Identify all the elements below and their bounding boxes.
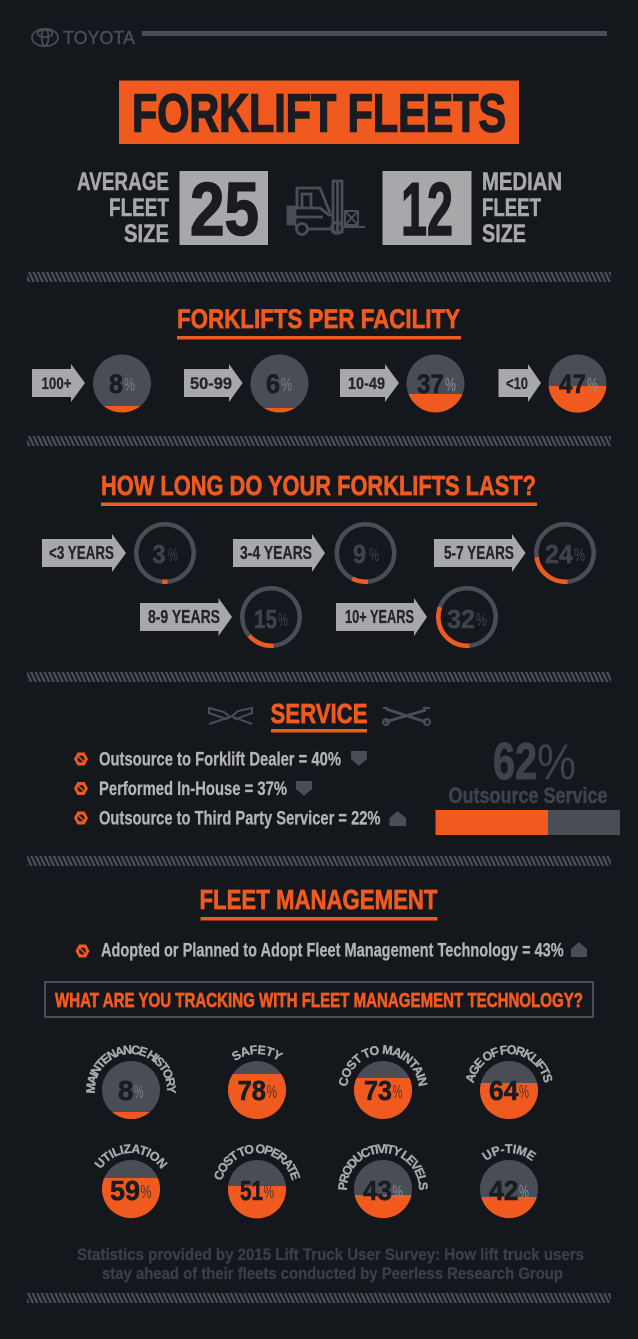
chart: safety 78%: SAFETY [232, 1045, 284, 1060]
heading: forklifts per facility: FORKLIFTS PER FACILITY [177, 304, 460, 334]
list item: in-house: Performed In-House = 37% [99, 779, 287, 800]
stat: under 10 47% [498, 354, 606, 413]
icon: bolt bullet [74, 752, 88, 766]
stat: under 3 years 3%: % [168, 545, 178, 565]
chart: cost to maintain 73% [339, 1045, 428, 1119]
stat: 100+ 8%: 100+ [42, 374, 72, 393]
stat: 62% outsource service: Outsource Service [448, 783, 608, 808]
title: FORKLIFT FLEETS [132, 84, 506, 144]
chart: up-time 42%: UP-TIME [482, 1144, 536, 1162]
stat: 25: 25 [190, 167, 259, 251]
stat: under 3 years 3%: <3 YEARS [49, 542, 114, 563]
icon: bolt bullet [74, 812, 88, 824]
header rule [142, 31, 607, 36]
chart: maintenance history 8%: MAINTENANCE HISTORY [86, 1045, 176, 1094]
stat: 5-7 years 24%: 24 [545, 539, 574, 569]
icon: down arrow [351, 751, 367, 766]
chart: cost to maintain 73%: COST TO MAINTAIN [339, 1045, 428, 1086]
chart: productivity levels 43%: 43 [363, 1175, 392, 1206]
chart: safety 78% [228, 1045, 286, 1119]
list item: third party: Outsource to Third Party Servicer = 22% [99, 808, 381, 830]
stat: 5-7 years 24%: 5-7 YEARS [444, 542, 514, 563]
icon: crossed screwdrivers [209, 708, 252, 724]
stat: 100+ 8%: % [124, 375, 135, 395]
chart: up-time 42%: % [519, 1182, 529, 1202]
stat: 62% outsource service: 62 [493, 733, 537, 791]
stat: under 3 years 3% [42, 522, 196, 584]
chart: cost to maintain 73%: % [392, 1082, 402, 1102]
panel: average fleet size [77, 167, 268, 251]
stat: 10+ years 32%: 32 [447, 604, 475, 634]
icon: bolt bullet [74, 782, 88, 795]
icon: up arrow [390, 811, 406, 826]
icon: up arrow [571, 942, 587, 957]
stat: 3-4 years 9% [233, 522, 397, 584]
chart: safety 78%: % [266, 1082, 277, 1102]
stat: 3-4 years 9%: % [369, 545, 379, 565]
panel: fleet management [44, 884, 594, 1218]
bar: 62% [436, 810, 620, 835]
chart: cost to maintain 73%: 73 [364, 1075, 392, 1106]
icon: bolt bullet [76, 944, 90, 958]
stat: under 10 47%: % [587, 375, 598, 395]
panel: how long do your forklifts last [42, 470, 596, 648]
callout: what are you tracking [45, 982, 593, 1017]
stat: 10-49 37%: % [445, 375, 456, 395]
stat: 8-9 years 15% [140, 586, 302, 648]
chart: utilization 59%: UTILIZATION [94, 1144, 168, 1169]
chart: up-time 42%: 42 [489, 1175, 518, 1206]
stat: 62% outsource service: % [537, 734, 576, 790]
chart: safety 78%: 78 [238, 1075, 266, 1106]
chart: maintenance history 8% [86, 1045, 176, 1119]
chart: age of forklifts 64%: 64 [489, 1075, 519, 1106]
panel: service [74, 698, 620, 835]
icon: down arrow [296, 781, 312, 796]
stat: under 10 47%: <10 [506, 374, 528, 393]
chart: cost to operate 51%: COST TO OPERATE [214, 1144, 300, 1181]
chart: age of forklifts 64% [466, 1045, 552, 1120]
chart: age of forklifts 64%: AGE OF FORKLIFTS [466, 1045, 552, 1084]
chart: utilization 59%: 59 [110, 1175, 140, 1206]
stat: 10-49 37% [340, 354, 464, 412]
footer: source note: stay ahead of their fleets conducted by Peerless Research Group [102, 1264, 563, 1283]
chart: productivity levels 43%: PRODUCTIVITY LEVELS [338, 1144, 428, 1190]
chart: productivity levels 43%: % [392, 1182, 403, 1202]
stat: under 3 years 3%: 3 [152, 539, 166, 569]
chart: maintenance history 8%: 8 [118, 1075, 134, 1106]
stat: 10-49 37%: 10-49 [348, 374, 385, 393]
label: median fleet size [482, 168, 562, 248]
stat: 3-4 years 9%: 9 [353, 539, 366, 569]
stat: 5-7 years 24% [434, 522, 596, 584]
stat: 8-9 years 15%: 8-9 YEARS [148, 606, 220, 627]
stat: 100+ 8%: 8 [109, 369, 123, 399]
icon: forklift [288, 181, 365, 234]
heading: fleet management: FLEET MANAGEMENT [200, 884, 438, 915]
footer: source note: Statistics provided by 2015 Lift Truck User Survey: How lift truck users [77, 1245, 584, 1264]
chart: cost to operate 51%: 51 [240, 1175, 263, 1206]
stat: under 10 47%: 47 [559, 369, 586, 399]
stat: 100+ 8% [32, 354, 151, 413]
list item: forklift dealer: Outsource to Forklift Dealer = 40% [99, 750, 341, 770]
label: average fleet size [77, 168, 169, 248]
chart: utilization 59%: % [140, 1182, 152, 1202]
icon: crossed wrenches [383, 708, 430, 725]
icon: Toyota emblem [32, 29, 58, 46]
label: average fleet size: AVERAGE [77, 168, 169, 196]
header: Toyota logo and rule [32, 28, 607, 48]
stat: 50-99 6% [184, 354, 308, 412]
chart: up-time 42% [480, 1144, 538, 1218]
stat: 5-7 years 24%: % [574, 545, 585, 565]
stat: 10+ years 32%: % [476, 610, 487, 630]
label: average fleet size: SIZE [124, 220, 169, 248]
stat: 3-4 years 9%: 3-4 YEARS [240, 542, 312, 563]
panel: median fleet size [382, 167, 562, 251]
stat: 10-49 37%: 37 [417, 369, 444, 399]
chart: utilization 59% [94, 1144, 168, 1218]
heading: service: SERVICE [270, 698, 368, 729]
chart: age of forklifts 64%: % [519, 1082, 529, 1102]
stat: 10+ years 32% [336, 586, 498, 648]
stat: 50-99 6%: 50-99 [190, 374, 232, 393]
stat: 50-99 6%: 6 [266, 369, 280, 399]
heading: fleet management [200, 884, 438, 920]
stat: 12 [382, 167, 472, 251]
label: median fleet size: FLEET [482, 194, 541, 222]
chart: cost to operate 51%: % [264, 1182, 274, 1202]
chart: cost to operate 51% [214, 1144, 300, 1218]
stat: 8-9 years 15%: % [278, 610, 288, 630]
Toyota wordmark: TOYOTA [63, 28, 135, 48]
label: median fleet size: SIZE [482, 220, 526, 248]
chart: productivity levels 43% [338, 1144, 428, 1218]
panel: forklifts per facility [32, 304, 606, 413]
stat: 50-99 6%: % [281, 375, 292, 395]
footer: source note [77, 1245, 584, 1283]
stat: 12: 12 [401, 167, 453, 251]
chart: maintenance history 8%: % [134, 1082, 144, 1102]
stat: 10+ years 32%: 10+ YEARS [345, 606, 414, 627]
stat: 8-9 years 15%: 15 [254, 604, 277, 634]
stat: 62% outsource service [436, 733, 620, 835]
label: median fleet size: MEDIAN [482, 168, 562, 196]
label: average fleet size: FLEET [109, 194, 169, 222]
